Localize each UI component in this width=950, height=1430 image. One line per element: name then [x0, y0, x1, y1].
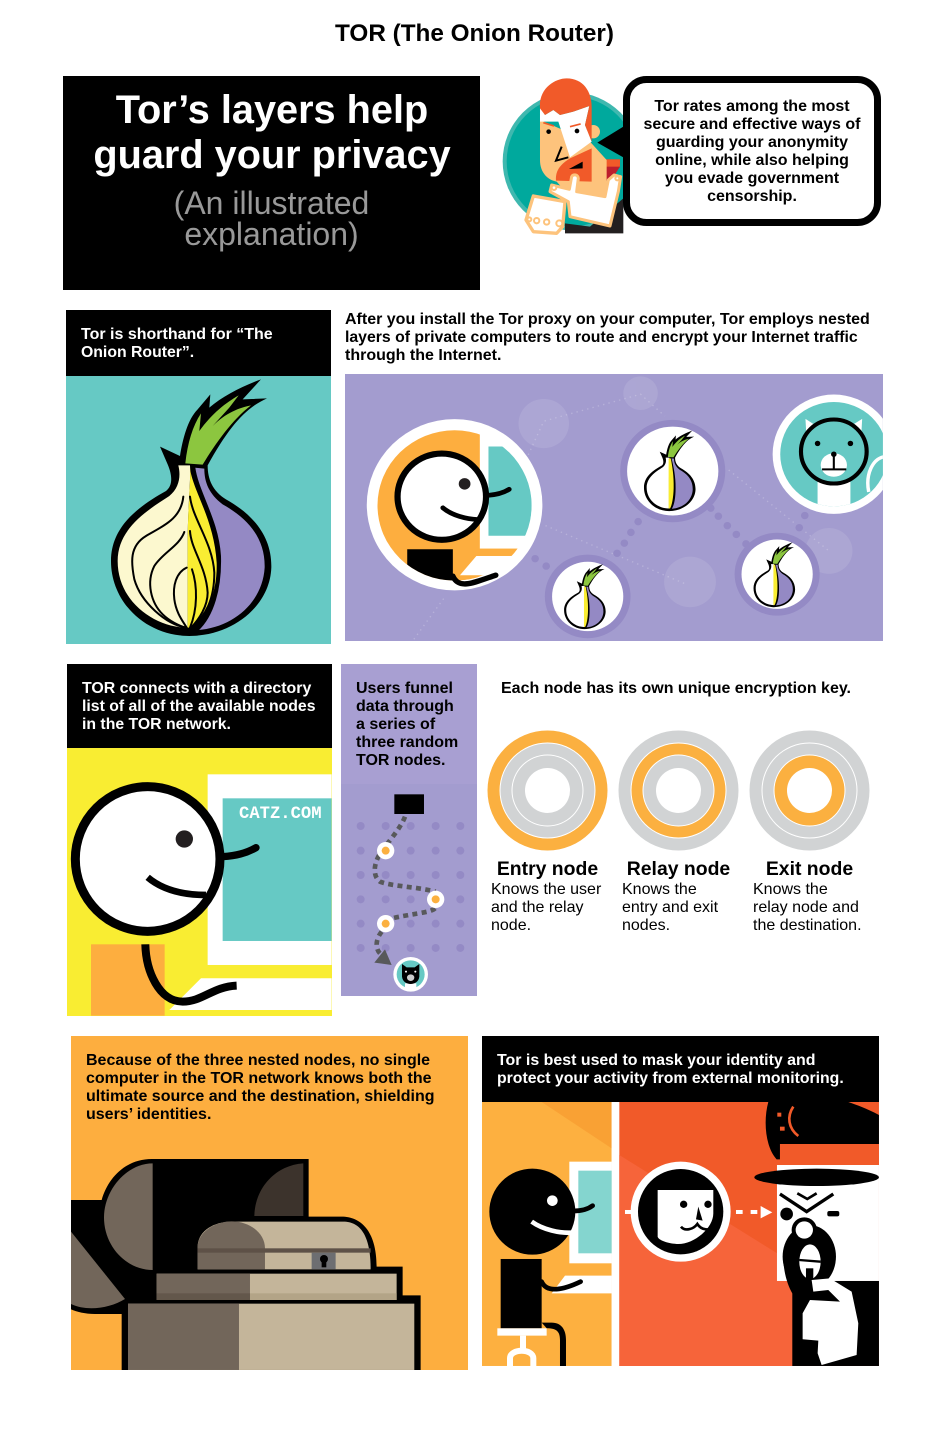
- caption: [81, 326, 273, 361]
- panel: directory: [67, 664, 332, 1016]
- panel: headline: [63, 76, 480, 290]
- panel: external monitoring: [482, 1036, 879, 1366]
- relay node label: Relay node: [627, 858, 730, 880]
- bubble text: censorship.: [707, 188, 797, 205]
- entry node description: and the relay: [491, 899, 584, 916]
- illustration: man with finger to lips: [503, 78, 641, 233]
- relay node description: entry and exit: [622, 899, 719, 916]
- relay node description: [622, 881, 719, 934]
- panel: Tor shorthand: [66, 310, 331, 644]
- relay node description: nodes.: [622, 917, 670, 934]
- panel: funnel: [341, 664, 477, 996]
- caption: a series of: [356, 716, 436, 733]
- text: install the Tor proxy: through the Internet.: [345, 347, 501, 364]
- caption: [86, 1052, 434, 1123]
- relay node description: Knows the: [622, 881, 697, 898]
- caption: data through: [356, 698, 454, 715]
- title: TOR (The Onion Router): [335, 20, 614, 47]
- monitoring agent: [754, 1102, 879, 1366]
- bubble text: secure and effective ways of: [644, 116, 861, 133]
- bubble text: Tor rates among the most: [654, 98, 850, 115]
- heading: Tor’s layers help: [116, 88, 428, 132]
- exit node description: Knows the: [753, 881, 828, 898]
- heading: [93, 88, 451, 177]
- exit node label: Exit node: [766, 858, 853, 880]
- bubble text: guarding your anonymity: [656, 134, 848, 151]
- rings: entry node: [488, 730, 608, 934]
- panel: nested nodes vault: [71, 1036, 468, 1370]
- node: onion relay 3: [735, 533, 820, 616]
- exit node description: the destination.: [753, 917, 862, 934]
- caption: Tor is shorthand for “The: [81, 326, 273, 343]
- entry node label: Entry node: [497, 858, 598, 880]
- caption: protect your activity from external monitoring.: [497, 1070, 844, 1087]
- caption: list of all of the available nodes: [82, 698, 316, 715]
- subheading: [174, 185, 369, 252]
- rings: relay node: [618, 730, 738, 934]
- caption: computer in the TOR network knows both the: [86, 1070, 432, 1087]
- text: install the Tor proxy: After you install the Tor proxy on your computer, Tor employs nested: [345, 311, 870, 328]
- text: install the Tor proxy: layers of private computers to route and encrypt your Internet traffic: [345, 329, 858, 346]
- illustration: treasure chest: [71, 1159, 421, 1370]
- arrow: [625, 1206, 772, 1218]
- caption: [82, 680, 316, 733]
- entry node description: Knows the user: [491, 881, 602, 898]
- caption: Tor is best used to mask your identity and: [497, 1052, 816, 1069]
- caption: Because of the three nested nodes, no single: [86, 1052, 430, 1069]
- subheading: explanation): [184, 216, 359, 252]
- caption: TOR connects with a directory: [82, 680, 311, 697]
- bubble text: you evade government: [665, 170, 840, 187]
- masked identity circle: [631, 1162, 731, 1262]
- rings: exit node: [750, 730, 870, 934]
- caption: ultimate source and the destination, shielding: [86, 1088, 434, 1105]
- text: install the Tor proxy: [345, 311, 870, 364]
- panel: network diagram: [345, 374, 895, 644]
- caption: Users funnel: [356, 680, 453, 697]
- bubble text: online, while also helping: [655, 152, 849, 169]
- entry node description: node.: [491, 917, 531, 934]
- icon: onion: [111, 379, 271, 636]
- caption: [497, 1052, 844, 1087]
- heading: guard your privacy: [93, 133, 451, 177]
- exit node description: [753, 881, 862, 934]
- bubble text: [644, 98, 861, 205]
- caption: three random: [356, 734, 458, 751]
- node: onion relay 2: [545, 555, 631, 638]
- speech bubble: [626, 80, 878, 222]
- label: catz.com: CATZ.COM: [239, 805, 322, 824]
- subheading: (An illustrated: [174, 185, 369, 221]
- exit node description: relay node and: [753, 899, 859, 916]
- caption: users’ identities.: [86, 1106, 211, 1123]
- user silhouette at computer: [489, 1162, 612, 1366]
- caption: [356, 680, 458, 769]
- text: each node: Each node has its own unique encryption key.: [501, 680, 851, 697]
- node: cat destination: [773, 395, 895, 514]
- entry node description: [491, 881, 602, 934]
- illustration: user at computer: [75, 774, 332, 1016]
- caption: in the TOR network.: [82, 716, 231, 733]
- node: onion relay 1: [620, 420, 725, 522]
- node: user at computer: [367, 419, 542, 590]
- caption: Onion Router”.: [81, 344, 194, 361]
- caption: TOR nodes.: [356, 752, 446, 769]
- diagram: route through nodes: [357, 794, 464, 992]
